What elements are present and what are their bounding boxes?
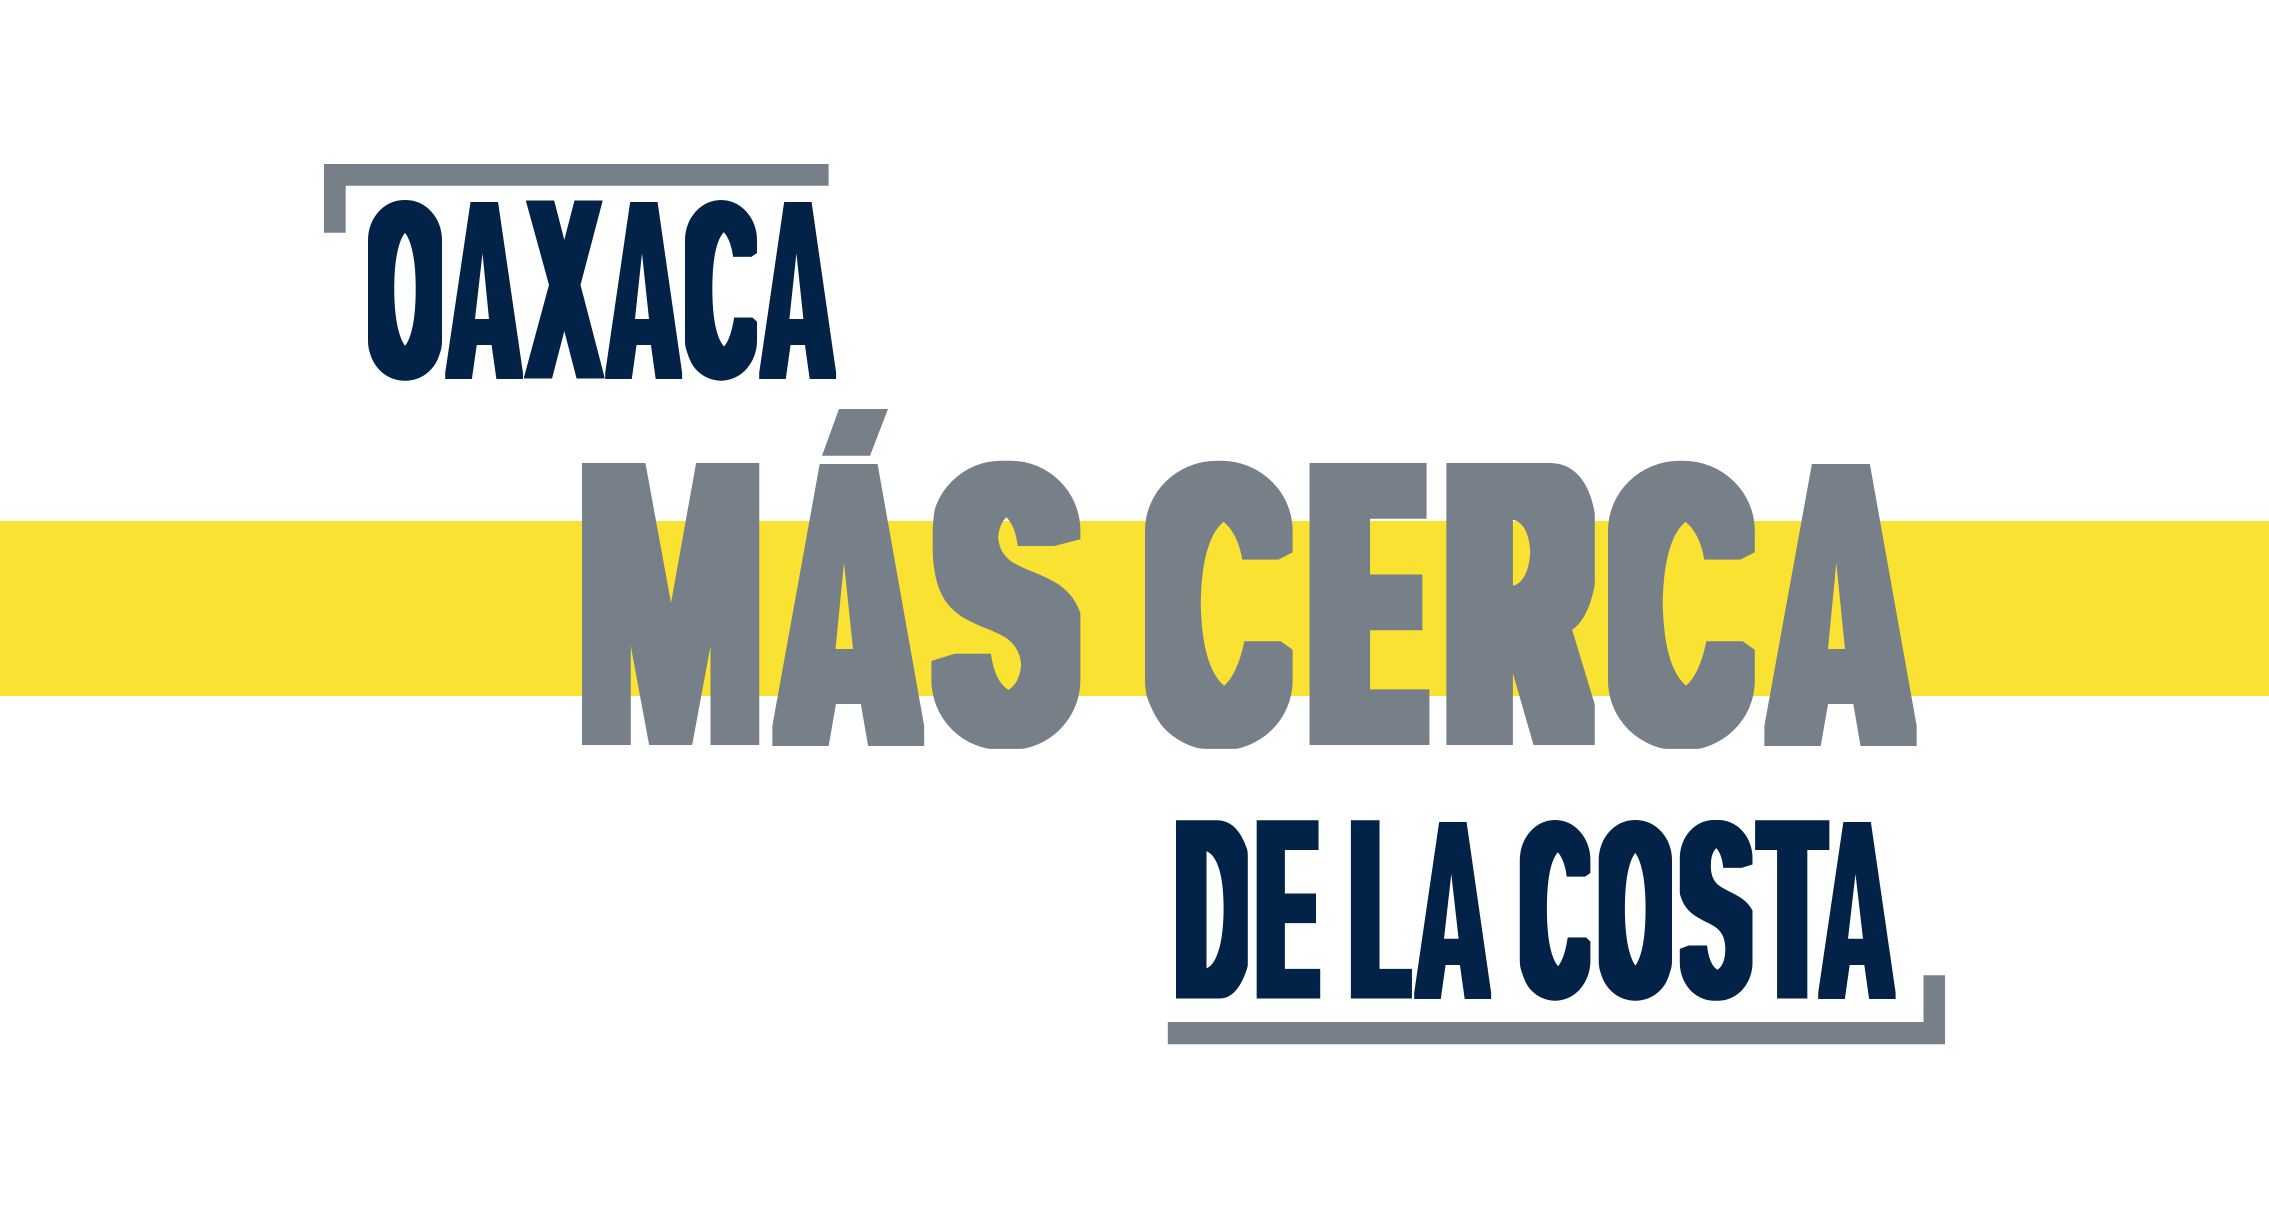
heading: MÁS CERCA: M: [577, 385, 764, 823]
heading: DE LA COSTA: O: [1598, 765, 1673, 1053]
heading: DE LA COSTA: S: [1679, 765, 1755, 1053]
heading: OAXACA: O: [367, 145, 443, 433]
heading: DE LA COSTA: D: [1177, 765, 1251, 1053]
heading: DE LA COSTA: A: [1423, 771, 1482, 1049]
letter A details: DE LA COSTA: [1444, 874, 1864, 965]
heading: MÁS CERCA: Á: [792, 391, 904, 817]
heading: OAXACA: A: [768, 151, 827, 429]
heading: DE LA COSTA: T: [1762, 765, 1822, 1053]
heading: DE LA COSTA: E: [1259, 765, 1316, 1053]
heading: MÁS CERCA: A: [1784, 391, 1897, 817]
yellow band: [0, 521, 2269, 696]
heading: MÁS CERCA: C: [1144, 385, 1294, 823]
heading: MÁS CERCA: S: [938, 385, 1076, 823]
heading: MÁS CERCA: C: [1606, 385, 1757, 823]
heading: DE LA COSTA: [1176, 765, 1896, 1053]
heading: MÁS CERCA: R: [1454, 385, 1587, 823]
top-left bracket: [324, 164, 829, 233]
heading: DE LA COSTA: A: [1827, 771, 1887, 1049]
heading: OAXACA: A: [454, 151, 514, 429]
heading: OAXACA: A: [614, 151, 673, 429]
heading: OAXACA: X: [528, 145, 599, 433]
letter A details: MÁS CERCA: [836, 563, 1854, 704]
heading: MÁS CERCA: [577, 385, 1917, 823]
heading: OAXACA: [368, 145, 836, 433]
heading: MÁS CERCA: E: [1320, 385, 1415, 823]
heading: DE LA COSTA: L: [1353, 765, 1407, 1053]
heading: DE LA COSTA: C: [1519, 765, 1592, 1053]
heading: OAXACA: C: [684, 145, 759, 433]
letter A details: OAXACA: [475, 254, 805, 345]
icon: acute accent: [822, 409, 888, 456]
bottom-right bracket: [1168, 975, 1945, 1044]
